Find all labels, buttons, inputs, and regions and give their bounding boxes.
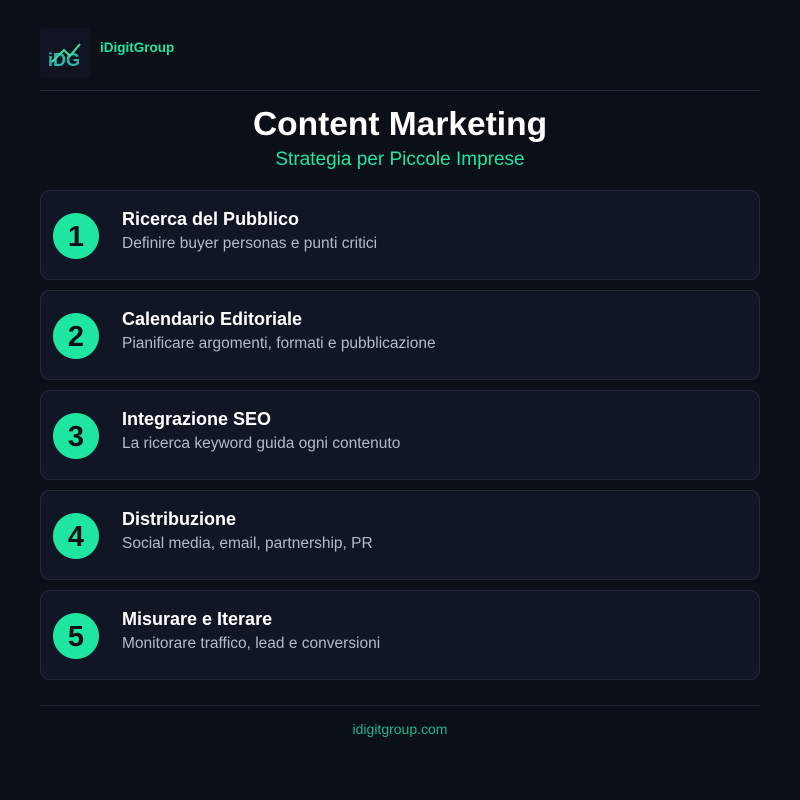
card 1: Definire buyer personas e punti critici <box>122 235 377 252</box>
footer: idigitgroup.com <box>353 721 447 737</box>
card 5: Misurare e Iterare <box>122 609 272 629</box>
card 2: Calendario Editoriale <box>122 309 302 329</box>
card 1 <box>40 190 760 280</box>
card 5: Monitorare traffico, lead e conversioni <box>122 635 380 652</box>
card 2: 2 <box>68 321 84 353</box>
subtitle: Strategia per Piccole Imprese <box>275 149 525 170</box>
card 5 <box>40 590 760 680</box>
card 1: Ricerca del Pubblico <box>122 209 299 229</box>
card 3: Integrazione SEO <box>122 409 271 429</box>
title: Content Marketing <box>253 106 547 143</box>
card 5: 5 <box>68 621 84 653</box>
logo: iDG <box>48 50 80 70</box>
card 3: La ricerca keyword guida ogni contenuto <box>122 435 400 452</box>
card 3: 3 <box>68 421 84 453</box>
card 1: 1 <box>68 221 84 253</box>
card 3 <box>40 390 760 480</box>
card 4: 4 <box>68 521 84 553</box>
brand name: iDigitGroup <box>100 40 174 55</box>
card 2 <box>40 290 760 380</box>
card 2: Pianificare argomenti, formati e pubblicazione <box>122 335 436 352</box>
card 4: Distribuzione <box>122 509 236 529</box>
card 4: Social media, email, partnership, PR <box>122 535 373 552</box>
logo <box>40 28 90 78</box>
card 4 <box>40 490 760 580</box>
